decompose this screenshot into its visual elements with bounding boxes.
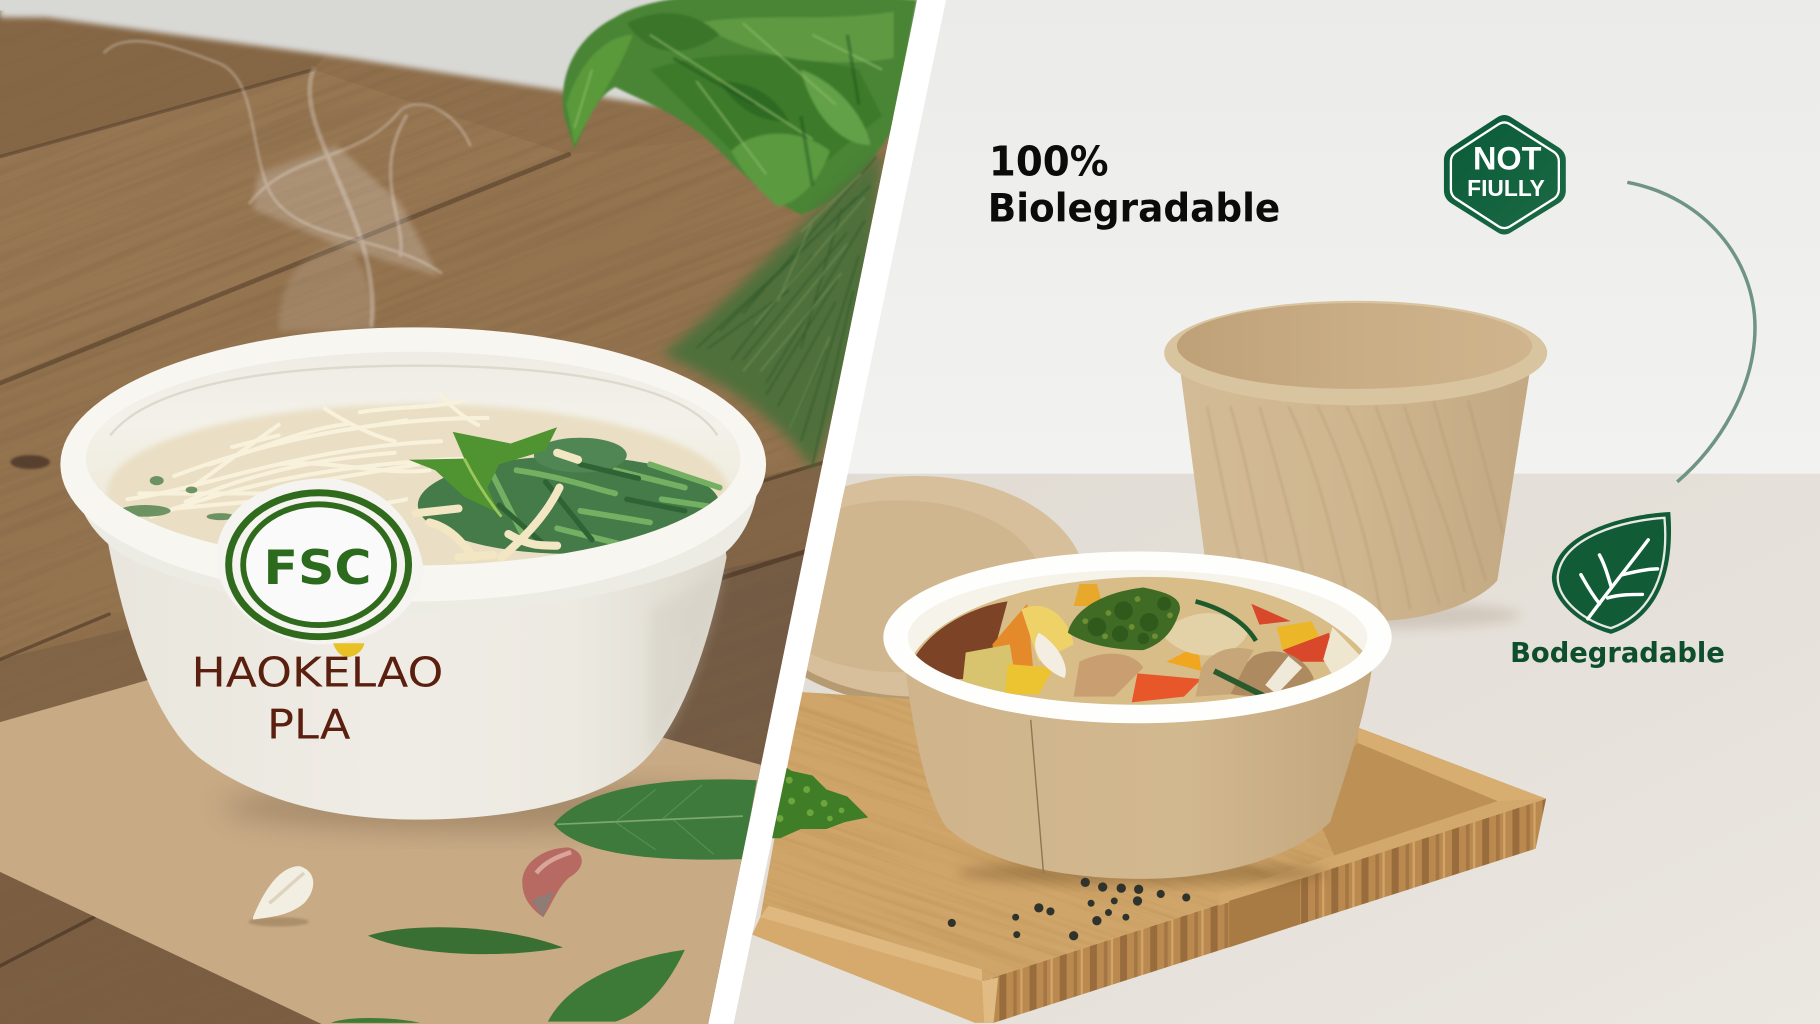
bowl inner wall	[86, 352, 741, 565]
steam	[104, 41, 470, 331]
brand text: HAOKELAO PLA: PLA	[267, 700, 351, 748]
heading: 100% Biolegradable: Biolegradable	[988, 186, 1280, 232]
shallot	[522, 848, 582, 917]
bowl shadow	[958, 861, 1329, 885]
FSC sticker on left bowl: FSC	[263, 541, 371, 596]
fluted kraft cup	[1164, 301, 1547, 629]
icon: biodegradable leaf	[1552, 512, 1671, 634]
grey wall behind table	[0, 10, 915, 114]
lettuce garnish, background	[563, 0, 917, 215]
dill garnish, background	[662, 151, 882, 470]
bowl body	[108, 544, 727, 820]
black seeds	[948, 878, 1190, 940]
seam	[1031, 720, 1043, 873]
heading: 100% Biolegradable: 100%	[989, 137, 1108, 185]
bowl rim	[60, 327, 766, 601]
soup with noodles and greens	[107, 395, 729, 580]
small leaf	[368, 927, 563, 954]
brand text: HAOKELAO PLA: HAOKELAO	[192, 649, 443, 697]
kraft paper placemat	[0, 650, 766, 1024]
green sprig	[754, 760, 868, 838]
wall	[848, 0, 1820, 474]
panel: left photo, white PLA bowl	[0, 0, 917, 1024]
body texture shade	[655, 573, 726, 738]
badge: NOT FIULLY hexagon: NOT	[1473, 141, 1542, 177]
bowl body	[905, 669, 1372, 879]
wooden table	[0, 0, 917, 1024]
stew	[910, 577, 1367, 708]
white bowl	[60, 327, 766, 830]
panel: right photo, kraft bowl	[720, 0, 1820, 1024]
white paper rim	[883, 551, 1392, 723]
arrow: curved connector	[1627, 182, 1755, 482]
brand text: HAOKELAO PLA	[192, 649, 443, 748]
yellow noodle accent	[333, 643, 364, 657]
kraft lid	[806, 476, 1079, 699]
bay leaf right	[554, 779, 757, 860]
bowl shadow	[221, 784, 754, 830]
broccoli	[1068, 587, 1180, 650]
badge: NOT FIULLY hexagon	[1444, 115, 1566, 235]
edge leaf	[331, 1018, 420, 1023]
lower leaf	[548, 950, 685, 1022]
table top	[720, 474, 1820, 1024]
label: Bodegradable: Bodegradable	[1510, 636, 1725, 669]
garlic clove	[248, 866, 313, 926]
wooden tray	[752, 692, 1546, 1023]
bowl lower lip	[84, 496, 756, 590]
kraft bowl with food	[883, 551, 1392, 885]
FSC sticker on left bowl	[217, 478, 424, 644]
heading: 100% Biolegradable	[988, 137, 1280, 232]
badge: NOT FIULLY hexagon: FIULLY	[1467, 175, 1545, 201]
